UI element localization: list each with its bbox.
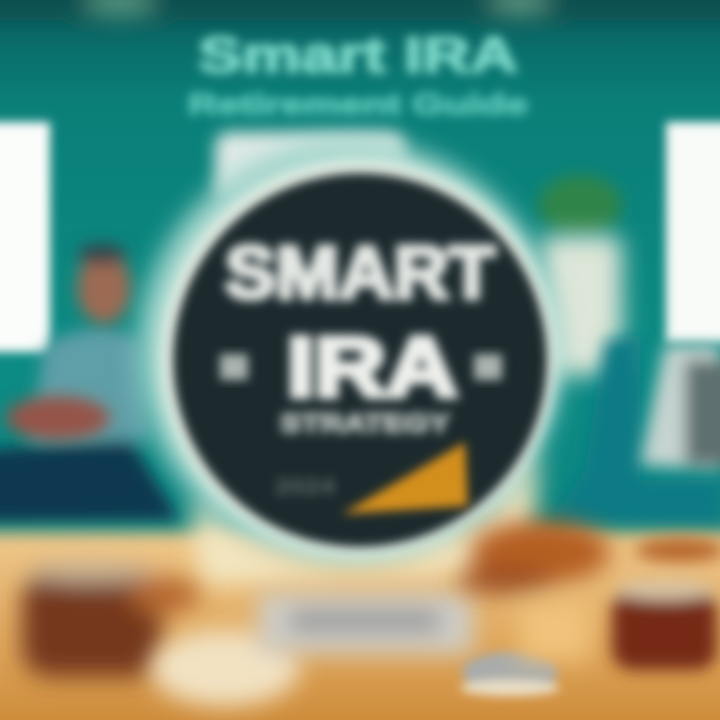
right monitor xyxy=(640,345,720,470)
badge small label: 2024 xyxy=(275,474,336,499)
plant xyxy=(538,175,622,235)
badge title: SMART: SMART xyxy=(225,231,495,314)
man: torso and legs xyxy=(0,329,180,522)
man: hands xyxy=(6,396,110,440)
badge dots xyxy=(220,354,502,380)
badge dark disc xyxy=(173,173,547,547)
badge outer ring xyxy=(138,140,562,585)
small dish xyxy=(460,652,560,696)
right window xyxy=(666,122,720,342)
booklet xyxy=(258,592,473,654)
badge title: IRA: IRA xyxy=(287,320,457,414)
badge caption: STRATEGY xyxy=(280,408,450,438)
left window xyxy=(0,122,50,352)
pastries xyxy=(457,520,610,660)
right tea cup xyxy=(612,538,720,670)
left tea cup xyxy=(22,562,200,677)
table xyxy=(0,532,720,720)
badge inner ring xyxy=(161,160,555,554)
vase xyxy=(540,235,622,375)
plate xyxy=(150,630,300,706)
badge orange wedge xyxy=(342,442,468,514)
man: head xyxy=(77,244,131,324)
centre wall light patch xyxy=(215,132,405,202)
right sofa xyxy=(550,335,720,525)
subheading: Retirement Guide xyxy=(188,89,528,121)
top dark band xyxy=(0,0,720,20)
heading: Smart IRA: Smart IRA xyxy=(198,27,518,83)
